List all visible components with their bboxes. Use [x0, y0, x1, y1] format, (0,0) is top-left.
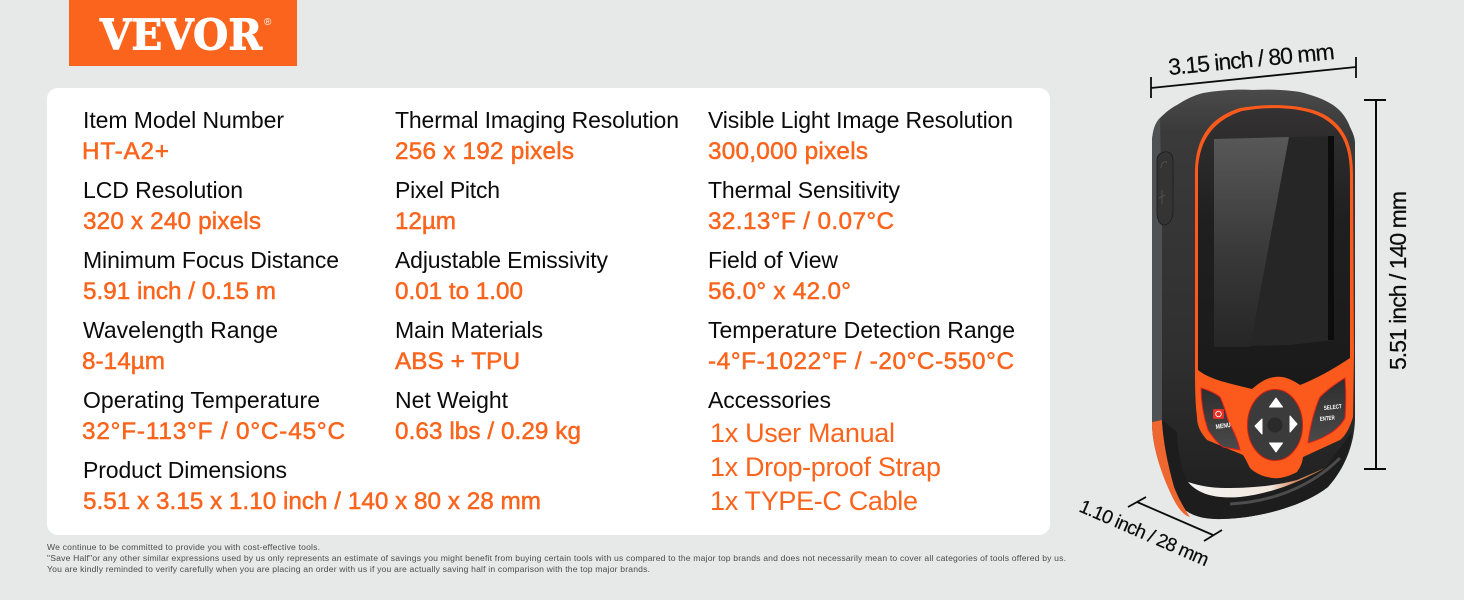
spec: temperature detection range: Temperature Detection Range: [708, 317, 1015, 343]
orange front ring: [1195, 105, 1354, 478]
dimension: height 5.51 inch / 140 mm: 5.51 inch / 140 mm: [1385, 191, 1411, 370]
spec: product dimensions: Product Dimensions: [83, 457, 287, 483]
footnote disclaimer: You are kindly reminded to verify carefully when you are placing an order with us if you are actually saving half in comparison with the top major brands.: [47, 564, 650, 574]
spec: item model number: Item Model Number: [83, 107, 284, 133]
spec: field of view: [708, 247, 851, 305]
dimension: depth 1.10 inch / 28 mm: 1.10 inch / 28 mm: [1076, 496, 1212, 571]
spec: thermal imaging resolution: [395, 107, 679, 165]
strap highlight: [1230, 458, 1340, 504]
select enter button: ENTER: [1320, 415, 1336, 423]
spec: adjustable emissivity: 0.01 to 1.00: [395, 278, 523, 305]
footnote disclaimer: "Save Half"or any other similar expressions used by us only represents an estimate of savings you might benefit from buying certain tools with us compared to the major top brands and does not necessarily mean to cover all categories of tools offered by us.: [47, 553, 1066, 563]
spec: wavelength range: Wavelength Range: [83, 317, 278, 343]
spec: thermal sensitivity: [708, 177, 900, 235]
logo: VEVOR: VEVOR: [99, 10, 263, 60]
spec: thermal imaging resolution: Thermal Imaging Resolution: [395, 107, 679, 133]
spec: operating temperature: 32°F-113°F / 0°C-45°C: [82, 418, 345, 445]
spec: field of view: 56.0° x 42.0°: [708, 278, 851, 305]
spec: item model number: HT-A2+: [82, 138, 169, 165]
spec: visible light image resolution: [708, 107, 1013, 165]
spec: visible light image resolution: Visible Light Image Resolution: [708, 107, 1013, 133]
footnote disclaimer: We continue to be committed to provide you with cost-effective tools.: [47, 542, 320, 552]
spec: adjustable emissivity: Adjustable Emissivity: [395, 247, 608, 273]
strap gap: [1188, 468, 1325, 497]
logo: VEVOR: ®: [264, 17, 272, 28]
spec: field of view: Field of View: [708, 247, 838, 273]
spec: minimum focus distance: Minimum Focus Distance: [83, 247, 339, 273]
select enter button: SELECT: [1324, 404, 1342, 412]
logo: VEVOR: [69, 0, 297, 66]
orange bumper lower left: [1152, 420, 1190, 517]
spec: product dimensions: [83, 457, 541, 515]
spec: product dimensions: 5.51 x 3.15 x 1.10 inch / 140 x 80 x 28 mm: [83, 488, 541, 515]
device body shell: [1152, 90, 1355, 519]
spec: main materials: Main Materials: [395, 317, 543, 343]
spec: main materials: ABS + TPU: [395, 348, 520, 375]
spec: adjustable emissivity: [395, 247, 608, 305]
spec: pixel pitch: [395, 177, 500, 235]
spec: LCD resolution: 320 x 240 pixels: [83, 208, 261, 235]
spec: thermal sensitivity: Thermal Sensitivity: [708, 177, 900, 203]
spec: minimum focus distance: 5.91 inch / 0.15 m: [83, 278, 276, 305]
product: thermal imager device: [1152, 90, 1355, 519]
menu button: MENU: [1215, 422, 1231, 431]
spec: operating temperature: [82, 387, 345, 445]
screen: [1214, 136, 1334, 347]
side port cover: [1157, 152, 1173, 225]
spec: main materials: [395, 317, 543, 375]
spec: thermal sensitivity: 32.13°F / 0.07°C: [708, 208, 894, 235]
spec: net weight: [395, 387, 581, 445]
spec: minimum focus distance: [83, 247, 339, 305]
spec: accessories: Accessories: [708, 387, 831, 413]
spec: net weight: 0.63 lbs / 0.29 kg: [395, 418, 581, 445]
front face: [1198, 108, 1350, 389]
spec: temperature detection range: -4°F-1022°F / -20°C-550°C: [708, 348, 1014, 375]
select enter button: [1308, 378, 1346, 443]
panel: specifications card: [47, 88, 1050, 535]
dimension: height 5.51 inch / 140 mm: [1364, 100, 1411, 469]
spec: operating temperature: Operating Temperature: [83, 387, 320, 413]
footnote disclaimer: [47, 542, 1066, 574]
menu button: [1201, 388, 1240, 450]
dimension: width 3.15 inch / 80 mm: 3.15 inch / 80 mm: [1167, 38, 1336, 80]
spec: accessories: 1x User Manual: [710, 418, 895, 448]
side grip strip: [1152, 118, 1162, 422]
spec: item model number: [82, 107, 284, 165]
spec: wavelength range: 8-14µm: [82, 348, 165, 375]
spec: accessories: [708, 387, 941, 516]
spec: LCD resolution: [83, 177, 261, 235]
spec: accessories: 1x Drop-proof Strap: [710, 452, 941, 482]
spec: thermal imaging resolution: 256 x 192 pixels: [395, 138, 574, 165]
strap loop: [1162, 420, 1352, 519]
spec: temperature detection range: [708, 317, 1015, 375]
spec: pixel pitch: Pixel Pitch: [395, 177, 500, 203]
dimension: width 3.15 inch / 80 mm: [1151, 38, 1356, 98]
spec: pixel pitch: 12µm: [395, 208, 456, 235]
spec: visible light image resolution: 300,000 pixels: [708, 138, 868, 165]
directional pad: [1248, 390, 1302, 460]
spec: LCD resolution: LCD Resolution: [83, 177, 243, 203]
spec: accessories: 1x TYPE-C Cable: [710, 486, 918, 516]
spec: wavelength range: [82, 317, 278, 375]
spec: net weight: Net Weight: [395, 387, 509, 413]
